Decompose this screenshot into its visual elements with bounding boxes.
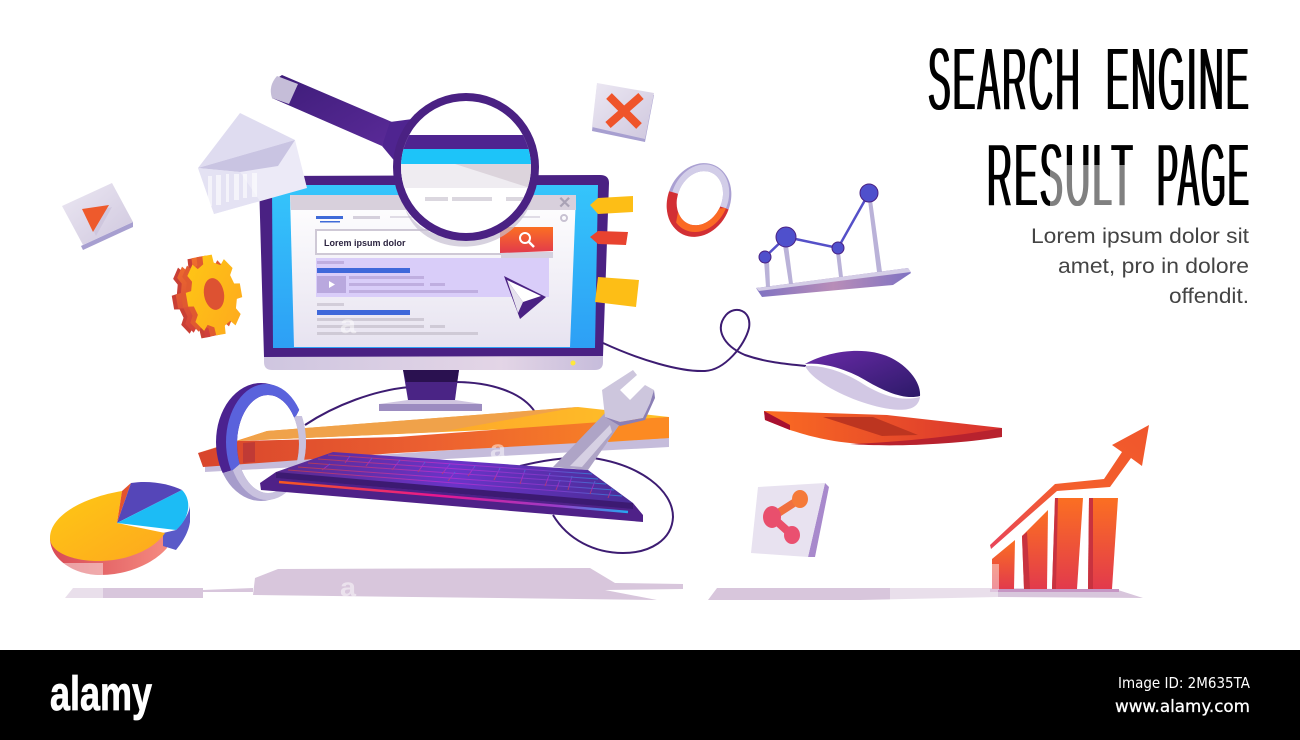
- result 2: [317, 303, 478, 335]
- handle: [271, 75, 420, 170]
- cursor arrow: [504, 276, 546, 319]
- power light: [570, 360, 576, 366]
- image id: Image ID: 2M635TA: [1118, 674, 1251, 692]
- subtitle: Lorem ipsum dolor sit: [1031, 225, 1249, 248]
- footer bar: [0, 650, 1300, 740]
- icon: ring gauge: [666, 163, 732, 237]
- desk: [198, 407, 669, 472]
- lens ring: [393, 93, 539, 241]
- monitor: [259, 175, 609, 370]
- subtitle: amet, pro in dolore: [1058, 255, 1249, 278]
- floor shadows: [65, 568, 1143, 600]
- plate: [756, 268, 911, 297]
- headset ring: [216, 383, 306, 501]
- close icon: ✕: [558, 195, 571, 212]
- cable: monitor to keyboard: [305, 382, 673, 553]
- watermark glyphs: a: [490, 434, 507, 464]
- points: [759, 184, 878, 263]
- data line: [765, 193, 869, 257]
- stems: [764, 200, 882, 287]
- growth chart: [990, 425, 1149, 592]
- magnifying glass: [271, 75, 539, 247]
- browser window: [290, 195, 576, 347]
- chart bars: [992, 498, 1118, 589]
- keyboard: [260, 452, 643, 522]
- subtitle: [1031, 225, 1249, 308]
- search button: [500, 227, 553, 253]
- footer logo: alamy: [50, 668, 152, 721]
- search button shadow: [501, 252, 553, 258]
- settings icon: [561, 215, 567, 221]
- watermark glyphs: a: [340, 572, 357, 602]
- title watermark tint: [1050, 165, 1132, 207]
- icon: play card: [62, 183, 133, 250]
- icon: share card: [751, 483, 829, 557]
- chart base: [990, 589, 1119, 592]
- envelope: [198, 113, 307, 214]
- monitor chin: [264, 355, 603, 370]
- search box: Lorem ipsum dolor: [324, 238, 406, 248]
- mouse cable: [603, 310, 806, 371]
- monitor frame: [259, 175, 609, 357]
- watermark glyphs: a: [340, 309, 357, 339]
- growth arrow: [990, 425, 1149, 549]
- screen: [272, 185, 598, 348]
- watermark patches: [63, 563, 999, 600]
- wrench: [553, 370, 655, 470]
- monitor stand: [379, 370, 482, 411]
- watermark glyphs: [340, 309, 507, 602]
- mouse pad: [764, 411, 1002, 445]
- search box: [316, 230, 502, 254]
- icon: gear: [166, 251, 248, 342]
- result 1 highlighted: [316, 258, 549, 297]
- lens view: [400, 100, 532, 235]
- line chart: [756, 184, 911, 297]
- nav tabs: [316, 216, 540, 222]
- icon: pie chart: [50, 482, 190, 575]
- mouse: [805, 351, 920, 410]
- lens shadow: [405, 195, 530, 247]
- icon: close card: [592, 83, 654, 142]
- title: [928, 30, 1251, 226]
- sticky tabs: [590, 196, 639, 307]
- website: www.alamy.com: [1115, 697, 1250, 717]
- subtitle: offendit.: [1169, 285, 1249, 308]
